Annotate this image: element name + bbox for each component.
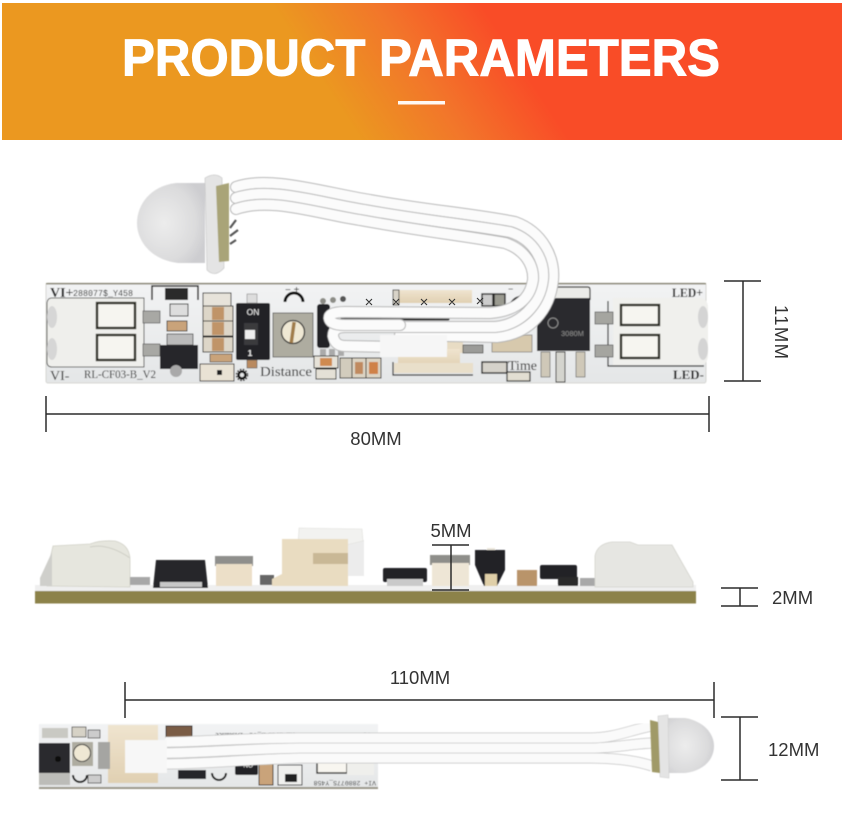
silkscreen labels: VI- (50, 369, 70, 384)
right terminal connector (595, 298, 708, 366)
bottom view: circuit board (39, 724, 378, 789)
bottom view: silkscreen: RL-CF03-B_V2 (249, 731, 295, 739)
left terminal connector (47, 298, 160, 367)
potentiometer: − + (285, 285, 300, 296)
top board connector housings (393, 290, 473, 375)
right terminal (595, 542, 693, 587)
bottom view: connector (98, 725, 158, 783)
right components: − (508, 284, 513, 294)
side small parts (517, 565, 595, 586)
silkscreen labels: RL-CF03-B_V2 (84, 369, 156, 381)
side connector housing (272, 528, 364, 586)
left terminal (47, 541, 130, 587)
silkscreen labels: VI+ (50, 286, 74, 301)
DIP switch: ON (247, 307, 259, 317)
bottom view: components (39, 726, 374, 785)
sensor header chip (317, 296, 346, 356)
silkscreen labels: 288077$_Y458 (73, 289, 133, 299)
dimension: 12MM: 12MM (768, 739, 819, 760)
MOSFET: 3080M (561, 329, 584, 338)
bottom view: silkscreen: VI- (361, 731, 372, 740)
top view: white plug (380, 335, 447, 357)
bottom view: PIR sensor dome (650, 715, 714, 778)
small components left (152, 286, 234, 381)
side black button (475, 548, 505, 586)
title underline (398, 101, 445, 104)
silkscreen labels: LED- (673, 367, 704, 382)
top view: circuit board (46, 283, 708, 384)
side switch (430, 555, 470, 586)
side view: circuit board (35, 528, 696, 604)
dimension: 12MM (721, 717, 819, 780)
dimension: 11MM (724, 281, 792, 381)
side IC (383, 568, 427, 586)
dimension: 2MM: 2MM (772, 587, 813, 608)
bottom view: sensor cable (125, 726, 652, 773)
header banner (2, 3, 842, 140)
right components (463, 284, 532, 381)
dimension: 80MM (46, 396, 709, 449)
bottom view: silkscreen (215, 731, 376, 786)
DIP switch: 1 (248, 348, 253, 358)
dimension: 110MM (125, 667, 714, 718)
top view: looped sensor cable (236, 183, 553, 347)
bottom view: silkscreen: Distance (215, 731, 243, 740)
dimension: 5MM: 5MM (430, 520, 472, 541)
side components (130, 556, 274, 588)
silkscreen labels: Distance (260, 365, 312, 380)
dimension: 2MM (721, 587, 813, 608)
bottom view: silkscreen: ON (243, 761, 253, 768)
silkscreen labels: LED+ (672, 285, 703, 300)
potentiometer (273, 285, 313, 357)
DIP switch (236, 294, 270, 368)
icon: gear (236, 369, 248, 381)
dimension: 11MM: 11MM (771, 305, 792, 359)
dimension: 5MM (430, 520, 472, 590)
bottom view: silkscreen: VI+ 288077S_Y458 (313, 779, 376, 786)
silkscreen labels: Time (508, 359, 537, 374)
MOSFET (537, 287, 590, 382)
silkscreen labels (50, 285, 704, 384)
dimension: 110MM: 110MM (390, 667, 450, 688)
components row (314, 356, 381, 379)
top view: x marks on board (366, 298, 483, 305)
title: PRODUCT PARAMETERS (122, 30, 720, 88)
dimension: 80MM: 80MM (350, 428, 402, 449)
top view: PIR sensor dome (137, 175, 238, 274)
